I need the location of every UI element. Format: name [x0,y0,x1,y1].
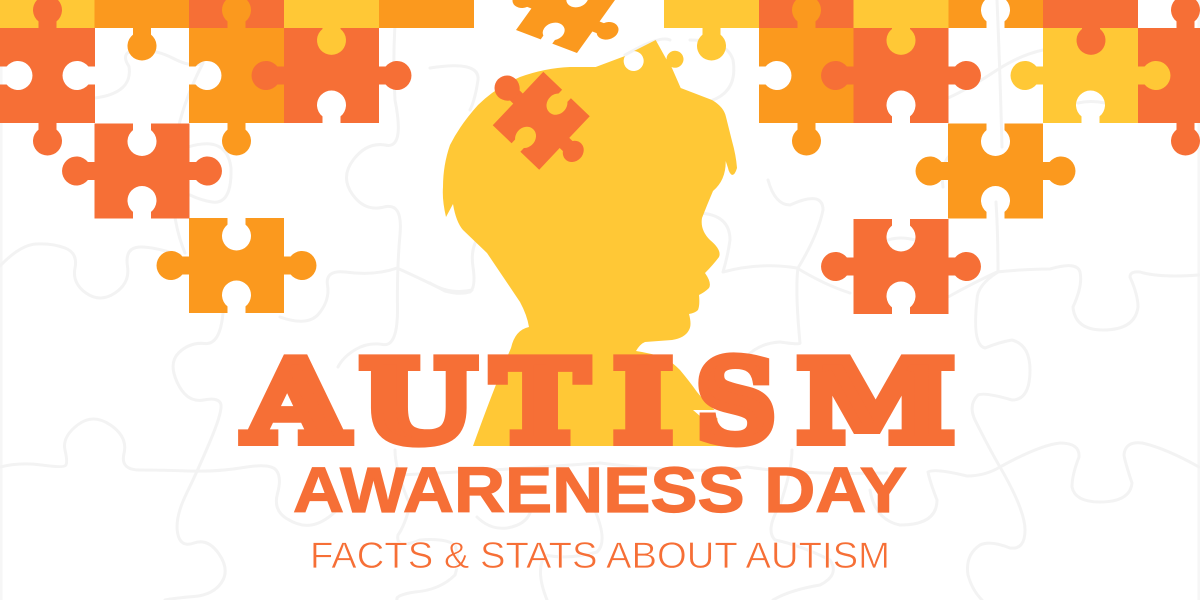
piece: yellow top row with bottom tab [664,0,759,60]
title: AUTISM: M [797,337,955,468]
title: AUTISM: S [696,337,776,468]
piece: red row one [821,28,981,123]
piece: orange top row with bottom tab [94,0,190,60]
piece: orange row two [916,124,1075,218]
piece: yellow row one [1011,28,1170,123]
piece: red far right [1138,0,1200,155]
piece: yellow top row with tab [854,0,948,60]
title: AUTISM: U [360,337,476,468]
piece: yellow knob into red [887,26,915,55]
piece: yellow knob into red [317,26,346,55]
puzzle pieces: top-right cluster [664,0,1200,314]
piece: orange row one [189,0,284,155]
piece: red row one left [0,0,95,155]
piece: red row two [62,124,222,218]
title: AUTISM: A [244,337,349,468]
subtitle: facts and stats: FACTS & STATS ABOUT AUTISM [310,535,890,576]
piece: red row three [821,219,981,314]
piece: yellow top row [0,0,95,28]
icon: falling orange puzzle piece [495,0,636,61]
icon: child head silhouette [443,40,737,446]
piece: orange row three [157,218,316,313]
piece: yellow top row with bottom tab [284,0,379,60]
heading: Awareness Day: AWARENESS DAY [293,454,907,526]
piece: red top row [189,0,284,28]
title: AUTISM: T [492,337,588,468]
piece: red top row [759,0,854,28]
piece: red top row with tab [1043,0,1138,60]
piece: orange top row with hole [948,0,1043,28]
piece: red row one with side tabs [252,28,411,123]
piece: orange row one [759,0,854,155]
piece: orange top row end [379,0,474,28]
title: AUTISM: I [613,337,673,468]
piece: red knob into yellow [1076,26,1106,55]
icon: red puzzle piece in head [477,57,606,185]
puzzle pieces: top-left cluster [0,0,474,313]
